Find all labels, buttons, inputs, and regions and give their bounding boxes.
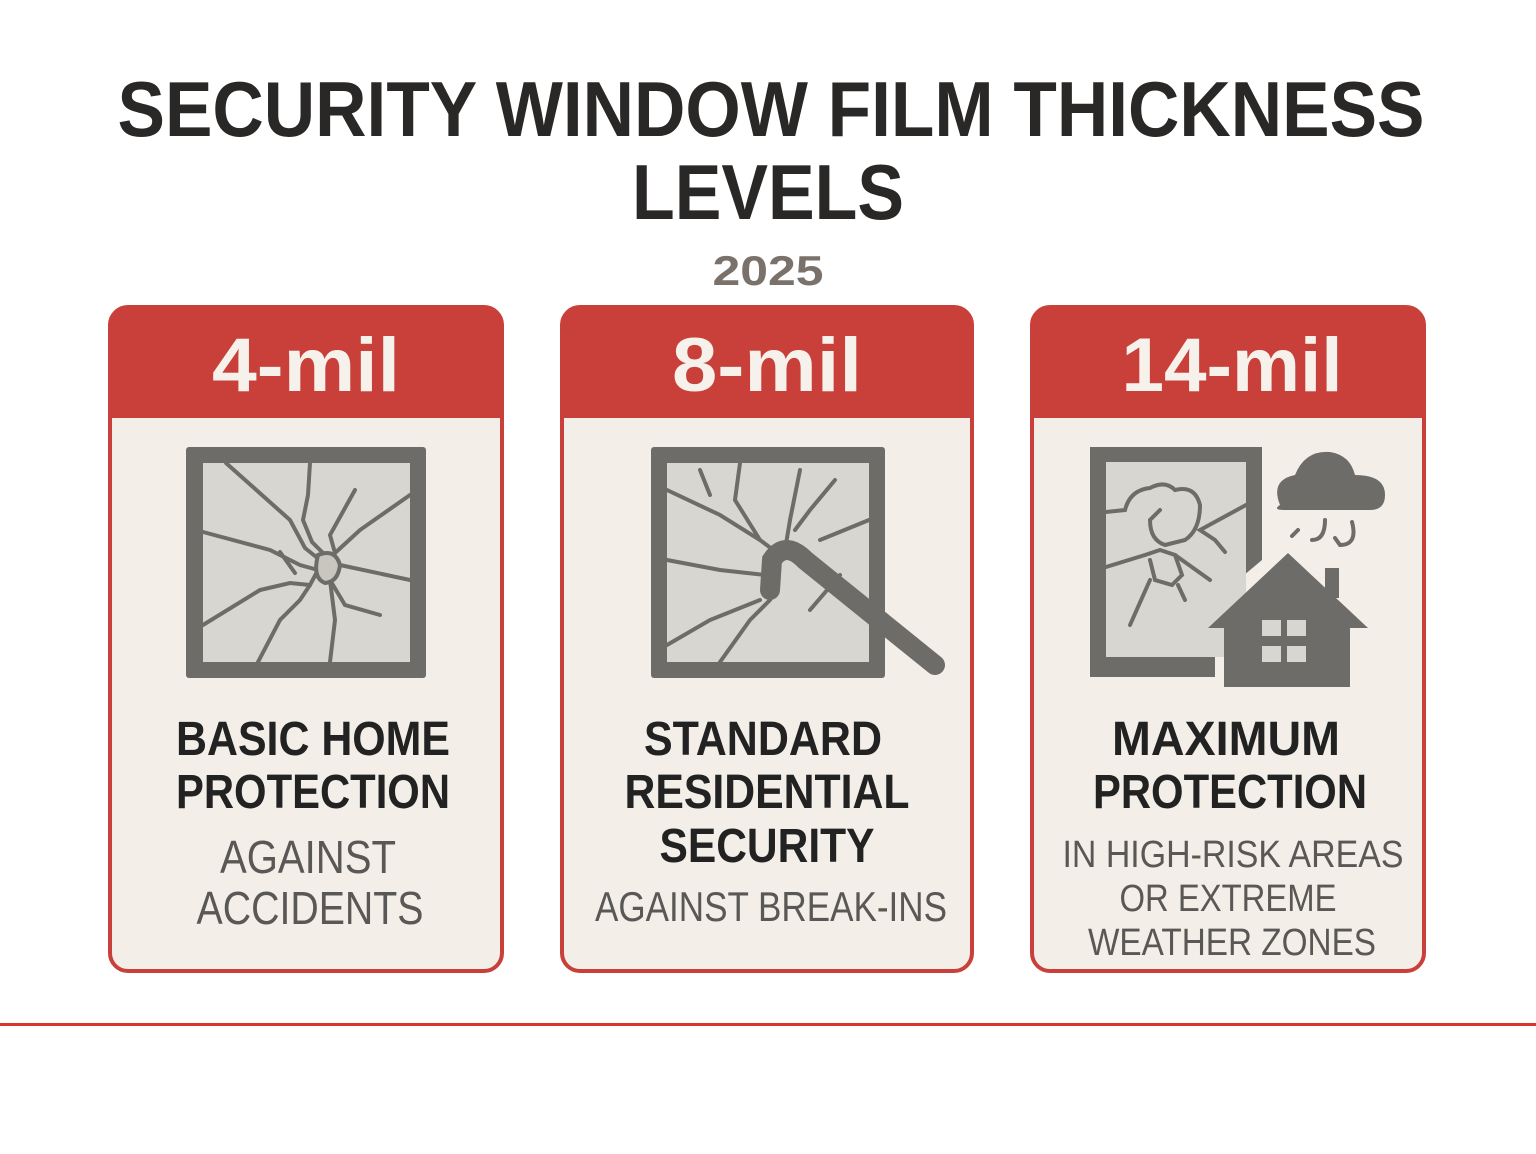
text: basic home protection: BASIC HOME: [176, 713, 450, 766]
subtitle year: 2025: [712, 247, 824, 294]
icon: window, storm cloud and house: [1090, 447, 1385, 687]
panel: 4-mil: [110, 307, 502, 971]
text: basic home protection: ACCIDENTS: [196, 882, 424, 934]
text: maximum protection: MAXIMUM: [1112, 713, 1340, 766]
text: maximum protection: [1062, 713, 1404, 964]
text: basic home protection: PROTECTION: [176, 766, 450, 819]
icon: cracked window: [186, 447, 426, 678]
text: standard residential security: AGAINST BREAK-INS: [595, 883, 947, 930]
title: SECURITY WINDOW FILM THICKNESS: [118, 65, 1424, 153]
heading: 4-mil: 4-mil: [212, 323, 400, 408]
text: maximum protection: OR EXTREME: [1120, 878, 1336, 920]
text: maximum protection: IN HIGH-RISK AREAS: [1062, 834, 1404, 876]
text: standard residential security: RESIDENTIAL: [624, 766, 910, 819]
title: [118, 65, 1424, 236]
text: standard residential security: SECURITY: [660, 820, 874, 873]
text: basic home protection: AGAINST: [220, 831, 396, 883]
title: LEVELS: [632, 148, 904, 236]
heading: 14-mil: 14-mil: [1122, 323, 1342, 408]
text: maximum protection: PROTECTION: [1093, 766, 1367, 819]
text: basic home protection: [176, 713, 450, 934]
panel: 8-mil: [562, 307, 972, 971]
text: standard residential security: STANDARD: [644, 713, 882, 766]
heading: 8-mil: 8-mil: [672, 323, 862, 408]
text: standard residential security: [595, 713, 947, 930]
panel: 14-mil: [1032, 307, 1424, 971]
icon: window with crowbar: [651, 447, 935, 678]
text: maximum protection: WEATHER ZONES: [1088, 922, 1376, 964]
